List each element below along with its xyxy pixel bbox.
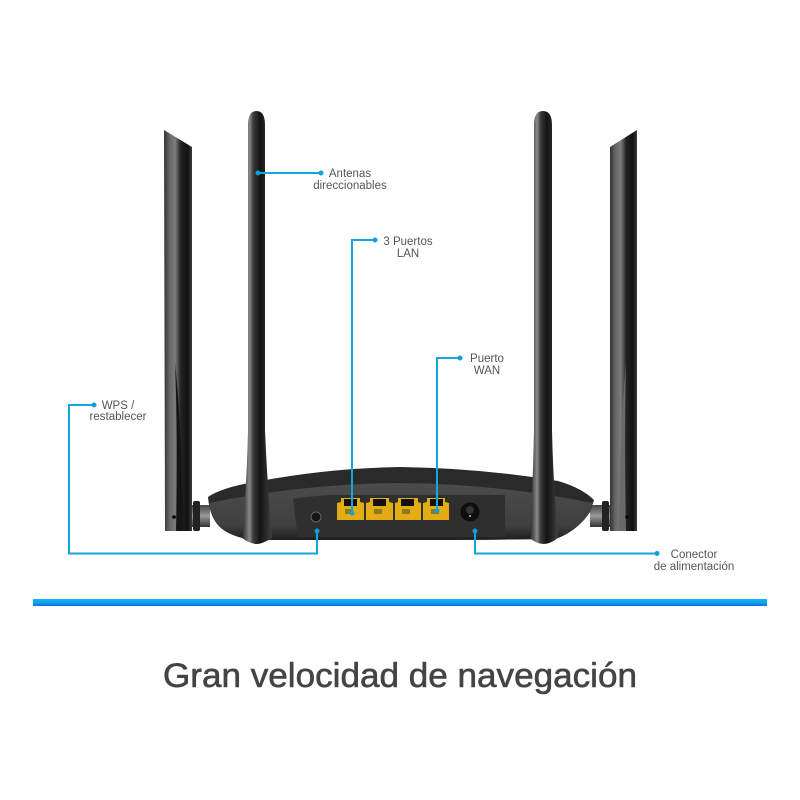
callout: 3 puertos LAN: 3 Puertos	[383, 236, 433, 248]
WPS button	[311, 512, 321, 522]
callout: antenas direccionables	[256, 168, 387, 192]
icon: right outer antenna	[610, 130, 637, 531]
callout: puerto WAN: Puerto	[470, 353, 504, 365]
LAN port 2	[366, 498, 393, 520]
callout: conector de alimentación: de alimentación	[654, 561, 734, 573]
callout: WPS / restablecer	[69, 400, 320, 554]
rear panel recess	[293, 495, 505, 537]
divider bar	[33, 599, 767, 606]
LAN port 3	[395, 498, 421, 520]
callout: antenas direccionables: Antenas	[329, 168, 371, 180]
icon: left outer antenna	[164, 130, 192, 531]
power connector	[460, 502, 480, 522]
router shell	[208, 467, 594, 540]
callout: 3 puertos LAN	[350, 236, 433, 516]
callout: conector de alimentación: Conector	[671, 549, 717, 561]
callout: 3 puertos LAN: LAN	[397, 248, 419, 260]
router front face	[209, 483, 592, 540]
icon: right antenna hinge	[590, 501, 610, 531]
router body	[208, 467, 594, 540]
callout: WPS / restablecer: WPS /	[102, 400, 135, 412]
callout: antenas direccionables: direccionables	[313, 180, 387, 192]
title: Gran velocidad de navegación	[163, 657, 637, 695]
callout: puerto WAN: WAN	[474, 365, 500, 377]
icon: right inner antenna	[530, 111, 558, 544]
icon: left inner antenna	[242, 111, 272, 544]
icon: left antenna hinge	[192, 501, 210, 531]
WAN port	[423, 498, 449, 520]
callout: WPS / restablecer: restablecer	[90, 411, 147, 423]
callout: puerto WAN	[434, 353, 504, 514]
LAN port 1	[337, 498, 364, 520]
callout: conector de alimentación	[472, 528, 734, 573]
